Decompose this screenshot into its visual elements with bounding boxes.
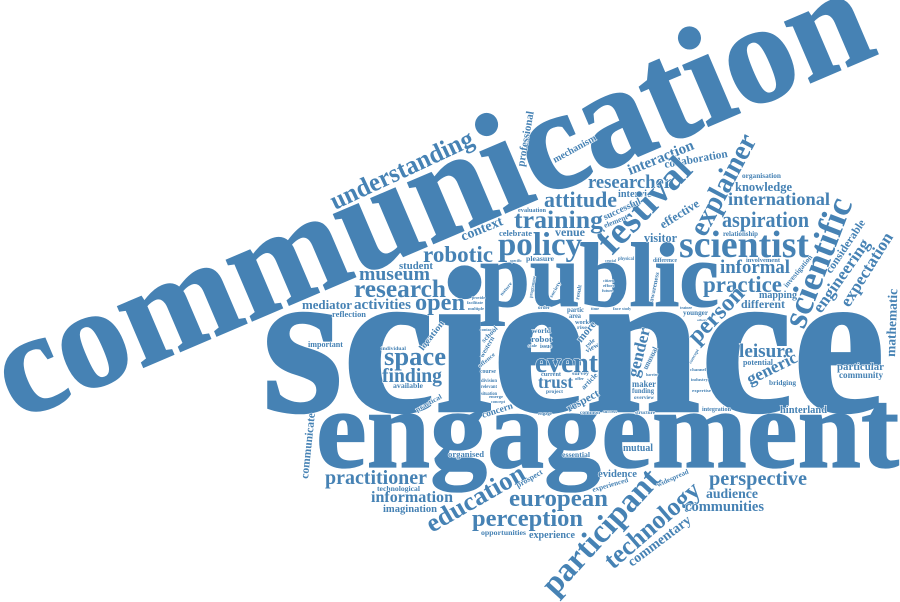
upper-left words: context <box>459 214 506 245</box>
lower-left words: information <box>371 489 453 506</box>
right-side words: younger <box>683 308 709 317</box>
lower-right words: perspective <box>709 468 807 490</box>
right-side words: different <box>741 297 785 311</box>
words inside the letters of science: trust <box>538 372 573 392</box>
upper-middle words <box>498 137 729 264</box>
words inside the letters of science: world <box>532 326 551 335</box>
right-side words: international <box>728 189 830 209</box>
words inside the letters of science: overview <box>634 396 654 401</box>
right-side words: relationship <box>723 230 758 238</box>
words inside the letters of science: scale <box>528 343 537 348</box>
lower-left words: technological <box>377 484 420 493</box>
words inside the letters of science: effort <box>603 283 615 288</box>
lower-left words: imagination <box>383 504 437 515</box>
lower-left words: success <box>603 409 617 414</box>
right-side words: trainee <box>680 305 692 310</box>
upper-left words: facilitate <box>467 300 483 305</box>
right-side words: engineering <box>809 235 874 316</box>
words inside the letters of science: more <box>574 319 599 345</box>
right-side words: expertise <box>692 388 711 393</box>
upper-left words: activities <box>354 297 411 313</box>
lower-left words: essential <box>562 450 590 459</box>
lower-right words <box>534 442 807 602</box>
upper-left words: understanding <box>325 124 478 215</box>
upper-middle words: element <box>602 212 629 230</box>
right-side words: community <box>839 370 883 380</box>
lower-right words: communities <box>685 499 764 515</box>
lower-left words: opportunities <box>481 528 526 537</box>
right-side words: generic <box>743 347 801 389</box>
upper-middle words: policy <box>498 227 582 263</box>
lower-left words: prospect <box>514 467 544 490</box>
right-side words: mapping <box>759 290 797 301</box>
words inside the letters of science: gender <box>623 325 654 379</box>
upper-left words: museum <box>359 264 430 285</box>
upper-middle words: physical <box>618 257 635 262</box>
words inside the letters of science <box>381 271 661 421</box>
upper-middle words: evaluation <box>518 207 546 214</box>
upper-left words: mediator <box>302 298 352 312</box>
lower-right words: commentary <box>625 513 694 570</box>
upper-middle words: celebrate <box>499 228 532 238</box>
words inside the letters of science: partic <box>567 306 584 314</box>
lower-left words: education <box>420 458 531 538</box>
lower-left words: communicate <box>299 412 318 479</box>
words inside the letters of science: view <box>584 340 601 355</box>
words inside the letters of science: work <box>575 320 590 326</box>
words inside the letters of science: funding <box>632 387 654 395</box>
words inside the letters of science: contact <box>480 327 493 332</box>
lower-left words: perception <box>472 505 583 532</box>
words inside the letters of science: finding <box>382 366 442 387</box>
right-side words: person <box>683 281 750 349</box>
words inside the letters of science: western <box>478 335 496 359</box>
word: engagement: engagement <box>316 368 899 492</box>
right-side words: knowledge <box>735 180 792 194</box>
upper-middle words: venue <box>555 225 586 239</box>
right-side words: informal <box>720 257 790 278</box>
words inside the letters of science: area <box>569 312 581 320</box>
right-side words: scientist <box>679 224 809 266</box>
upper-middle words: training <box>514 205 603 234</box>
lower-right words: technology <box>598 475 706 575</box>
right-side words: aspiration <box>722 207 809 232</box>
upper-middle words: researcher <box>588 173 672 193</box>
words inside the letters of science: result <box>575 285 584 300</box>
words inside the letters of science: concept <box>491 399 506 404</box>
lower-left words <box>299 407 732 541</box>
words inside the letters of science: school <box>480 325 500 344</box>
words inside the letters of science: current <box>541 372 561 378</box>
words inside the letters of science: time <box>591 306 599 311</box>
words inside the letters of science: rise <box>577 326 588 331</box>
words inside the letters of science: individual <box>381 346 406 352</box>
words inside the letters of science: course <box>480 369 496 375</box>
upper-left words: open <box>415 290 465 316</box>
lower-right words: widespread <box>656 468 690 489</box>
upper-left words: provide <box>472 295 485 300</box>
words inside the letters of science: situation <box>481 392 497 397</box>
words inside the letters of science: practical <box>414 393 443 414</box>
words inside the letters of science: division <box>481 379 497 384</box>
lower-right words: mutual <box>623 442 653 454</box>
words inside the letters of science: space <box>384 342 446 371</box>
right-side words: particular <box>837 361 884 373</box>
right-side words <box>679 128 900 416</box>
words inside the letters of science: offer <box>575 376 584 381</box>
words inside the letters of science: respect <box>565 388 602 415</box>
right-side words: concept <box>688 348 700 364</box>
lower-right words: participant <box>534 462 668 602</box>
words inside the letters of science: nature <box>500 281 514 297</box>
words inside the letters of science: role <box>584 338 597 350</box>
lower-left words: structure <box>635 411 656 416</box>
lower-left words: engage <box>538 411 552 416</box>
upper-left words: research <box>354 274 446 303</box>
upper-middle words: crucial <box>605 258 617 263</box>
words inside the letters of science: survey <box>572 372 590 377</box>
upper-middle words: successful <box>602 197 643 223</box>
right-side words: explainer <box>683 128 763 241</box>
right-side words: hinterland <box>780 405 827 416</box>
words inside the letters of science: society <box>549 280 563 299</box>
word: public: public <box>480 225 719 326</box>
right-side words: potential <box>743 358 774 367</box>
upper-middle words: festival <box>588 148 700 262</box>
words inside the letters of science: concern <box>481 401 515 421</box>
upper-left words: mechanism <box>551 132 599 166</box>
upper-middle words: specific <box>510 258 522 263</box>
upper-left words: professional <box>515 110 537 168</box>
upper-middle words: effective <box>657 196 702 232</box>
right-side words: industry <box>691 377 709 382</box>
upper-middle words: collaboration <box>663 148 729 171</box>
right-side words: channel <box>690 367 707 372</box>
right-side words: scientific <box>774 192 860 333</box>
upper-middle words: attitude <box>544 187 617 212</box>
right-side words: investigation <box>782 252 815 289</box>
words inside the letters of science: maker <box>632 379 656 389</box>
upper-left words: reflection <box>332 310 367 319</box>
lower-left words: common <box>580 410 600 416</box>
upper-middle words: visitor <box>644 231 678 245</box>
words inside the letters of science: future <box>602 288 613 293</box>
words inside the letters of science: order <box>538 306 551 311</box>
words inside the letters of science: available <box>393 381 424 390</box>
words inside the letters of science: emerge <box>489 394 503 399</box>
upper-left words: multiple <box>468 306 484 311</box>
words inside the letters of science: article <box>579 370 600 391</box>
lower-left words: practitioner <box>325 467 427 489</box>
upper-middle words: interaction <box>626 137 697 179</box>
words inside the letters of science: study <box>622 306 631 311</box>
right-side words: expectation <box>836 228 897 310</box>
lower-left words: experience <box>529 530 576 541</box>
upper-middle words: difference <box>653 258 677 264</box>
upper-left words: robotic <box>423 242 493 267</box>
upper-left words: student <box>399 261 434 272</box>
lower-left words: organised <box>448 450 484 459</box>
words inside the letters of science: issue <box>540 344 552 350</box>
lower-right words: experienced <box>591 476 629 494</box>
words inside the letters of science: barrier <box>646 372 658 377</box>
lower-right words: audience <box>706 486 758 501</box>
right-side words: practice <box>703 272 782 297</box>
words inside the letters of science: relevant <box>481 385 497 390</box>
words inside the letters of science: event <box>535 348 599 379</box>
upper-middle words: pleasure <box>526 254 555 263</box>
lower-left words: integration <box>702 407 732 413</box>
right-side words: leisure <box>739 341 793 362</box>
words inside the letters of science: unusual <box>641 345 660 371</box>
right-side words: considerable <box>824 218 868 276</box>
words inside the letters of science: robot <box>531 335 552 344</box>
words inside the letters of science: offence <box>477 352 497 370</box>
word: science: science <box>262 226 885 456</box>
words inside the letters of science: face <box>613 306 621 311</box>
right-side words: bridging <box>769 378 796 387</box>
lower-right words: evidence <box>598 469 637 480</box>
upper-left words <box>302 110 599 349</box>
right-side words: mathematic <box>883 289 900 357</box>
words inside the letters of science: location <box>417 318 446 352</box>
right-side words: organisation <box>742 171 781 180</box>
right-side words: others <box>697 318 708 322</box>
words inside the letters of science: programme <box>529 275 538 298</box>
words inside the letters of science: project <box>546 389 563 395</box>
right-side words: involvement <box>746 257 781 264</box>
lower-left words: european <box>509 485 608 512</box>
words inside the letters of science: citizen <box>603 278 614 283</box>
upper-middle words: interview <box>618 189 660 200</box>
upper-left words: important <box>308 340 343 349</box>
words inside the letters of science: awareness <box>648 271 661 302</box>
